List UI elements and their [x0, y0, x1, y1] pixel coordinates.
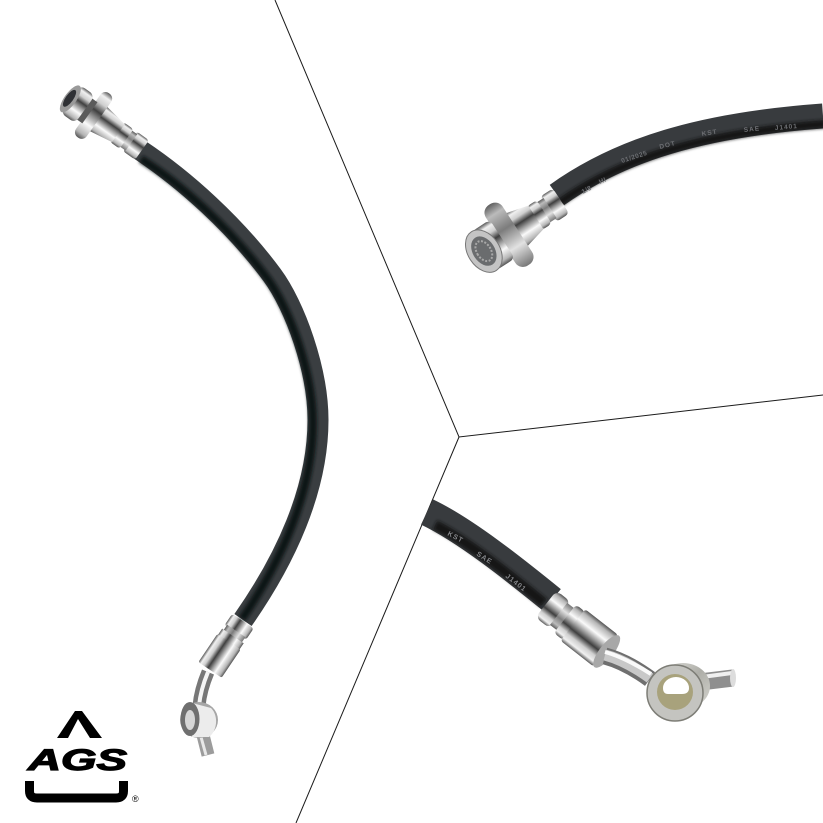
bent pipe	[199, 672, 208, 706]
hose markings: 1/8	[581, 185, 593, 196]
hose body	[557, 116, 823, 203]
top fitting	[50, 73, 158, 172]
threaded fitting	[451, 171, 581, 290]
hose body	[427, 512, 552, 603]
banjo back	[656, 663, 710, 709]
hose markings: KST	[701, 129, 718, 138]
dividing lines	[275, 0, 823, 823]
hose markings: J1401	[504, 573, 527, 594]
banjo ring	[647, 665, 703, 721]
logo: base bracket	[30, 781, 124, 798]
AGS logo	[26, 711, 139, 804]
banjo body	[180, 702, 218, 738]
registered mark: ®	[132, 794, 139, 804]
hose markings: SAE	[743, 125, 760, 134]
collar	[534, 588, 625, 671]
hose markings: J1401	[775, 123, 798, 132]
hose markings: KST	[446, 531, 464, 545]
hose markings	[446, 531, 527, 594]
banjo fitting	[180, 613, 255, 755]
hose markings: DOT	[659, 140, 677, 151]
stub	[700, 678, 733, 682]
stub	[203, 735, 208, 755]
collar	[198, 613, 255, 678]
hose markings: HI	[598, 176, 608, 186]
logo: wordmark: AGS	[26, 744, 127, 777]
bent pipe	[605, 656, 650, 679]
detail: banjo end	[427, 512, 736, 721]
hose markings: SAE	[475, 551, 493, 566]
full brake hose	[50, 73, 318, 755]
hose markings: 01/2025	[620, 150, 648, 165]
logo: chevron	[57, 711, 102, 738]
hose body	[140, 150, 318, 620]
detail: threaded end	[451, 116, 823, 290]
threaded opening	[458, 223, 510, 279]
hose markings	[581, 123, 798, 196]
